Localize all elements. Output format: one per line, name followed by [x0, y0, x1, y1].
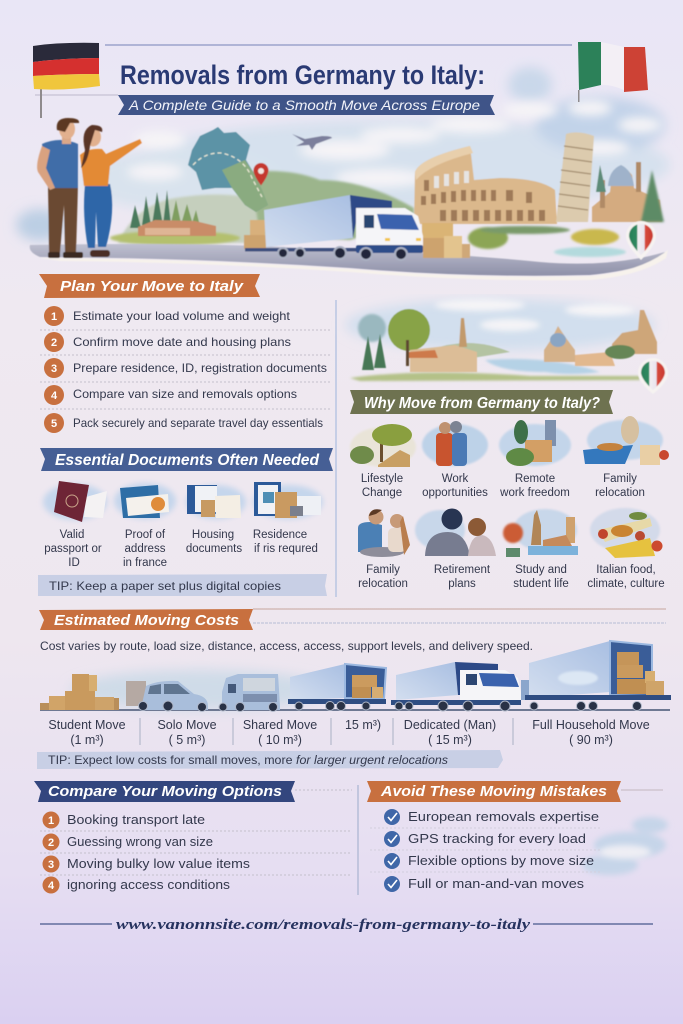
header rule lines [35, 45, 572, 95]
step 2: 2 [51, 337, 57, 349]
option 1: 1 [48, 815, 54, 827]
heading: plan your move [39, 274, 260, 298]
reason: family relocation food [583, 416, 669, 499]
reason: lifestyle change: Lifestyle [361, 473, 403, 485]
cost: box truck open [288, 664, 386, 710]
shrubs and riverbank [468, 226, 626, 257]
option 4: ignoring access conditions [67, 877, 231, 892]
hero sky [16, 67, 670, 241]
cypress trees and villa [110, 190, 240, 245]
reason: retirement plans [415, 508, 496, 590]
label: solo move: ( 5 m³) [169, 733, 205, 747]
heading: compare options: Compare Your Moving Options [48, 783, 282, 800]
step 5 [44, 413, 323, 433]
document: residence [253, 482, 321, 555]
icon: map pin [253, 163, 269, 186]
reason: family relocation food: relocation [595, 487, 645, 499]
hills [118, 194, 262, 243]
reason: study and student life: student life [513, 578, 569, 590]
heading: moving costs: Estimated Moving Costs [54, 612, 239, 629]
cost: full household truck [521, 641, 671, 710]
panel: essential documents [38, 448, 333, 596]
label: full household: ( 90 m³) [569, 733, 613, 747]
option 2: Guessing wrong van size [67, 834, 213, 849]
step 3: 3 [51, 363, 57, 375]
check item 2: GPS tracking for every load [408, 831, 586, 846]
cost description: Cost varies by route, load size, distance, access, access, support levels, and delivery speed. [40, 639, 533, 653]
step 3 [44, 358, 327, 378]
document: proof of address: address [125, 543, 166, 555]
reason: remote work freedom [499, 420, 571, 499]
label: dedicated: ( 15 m³) [428, 733, 472, 747]
panel: avoid mistakes [367, 781, 668, 892]
subtitle banner [118, 95, 495, 115]
document: proof of address [120, 485, 169, 569]
step 4 [44, 385, 297, 405]
option 3: 3 [48, 859, 54, 871]
reason: family relocation food: Family [603, 473, 637, 485]
document: passport: ID [68, 557, 80, 569]
cost: solo van [126, 681, 208, 712]
document: housing: documents [186, 543, 242, 555]
label: student move: (1 m³) [70, 733, 104, 747]
heading: moving costs [39, 609, 253, 630]
step 1: Estimate your load volume and weight [73, 309, 291, 323]
heading: avoid mistakes [367, 781, 621, 802]
map of route [188, 127, 268, 212]
man figure [37, 118, 83, 258]
panel: estimated moving costs [37, 609, 671, 769]
tip: documents: TIP: Keep a paper set plus digital copies [49, 579, 281, 593]
footer url: www.vanonnsite.com/removals-from-germany-to-italy [116, 917, 530, 933]
document: passport: passport or [44, 543, 102, 555]
heading: essential documents: Essential Documents Often Needed [55, 452, 320, 469]
heading: essential documents [40, 448, 333, 471]
label: dedicated: Dedicated (Man) [404, 718, 496, 732]
leaning tower [556, 132, 594, 222]
tip: moving costs [37, 750, 503, 769]
flag: Germany [33, 43, 100, 118]
step 5: Pack securely and separate travel day essentials [73, 416, 323, 430]
label: solo move: Solo Move [157, 718, 217, 732]
moving truck [245, 195, 423, 260]
option 2: 2 [48, 837, 54, 849]
reason: retirement plans: Retirement [434, 564, 491, 576]
step 1: 1 [51, 311, 57, 323]
reason: Italian food [587, 508, 665, 590]
reason: work opportunities [422, 421, 488, 499]
icon: Italy pin hero [626, 221, 656, 260]
reason: family relocation couple: Family [366, 564, 400, 576]
step 1 [44, 306, 291, 326]
option 4: 4 [48, 880, 55, 892]
document: passport: Valid [60, 529, 84, 541]
option 3: Moving bulky low value items [67, 856, 251, 871]
flag: Italy [578, 42, 648, 102]
reason: lifestyle change: Change [362, 487, 402, 499]
document: passport [44, 481, 107, 569]
panel: compare options [34, 781, 352, 894]
reason: remote work freedom: work freedom [499, 487, 570, 499]
icon: Italy pin [638, 358, 668, 394]
step 2: Confirm move date and housing plans [73, 335, 291, 349]
cost: dedicated truck [391, 662, 521, 711]
panel: reasons grid [350, 416, 669, 590]
reason: family relocation couple: relocation [358, 578, 408, 590]
document: housing: Housing [192, 529, 234, 541]
heading: compare options [34, 781, 295, 802]
couple pointing [37, 118, 142, 258]
option 1: Booking transport late [67, 812, 205, 827]
cost: shared van [219, 674, 280, 712]
reason: study and student life [503, 509, 578, 590]
check item 4: Full or man-and-van moves [408, 876, 585, 891]
document: residence: if ris requred [254, 543, 318, 555]
road [30, 244, 665, 276]
document: residence: Residence [253, 529, 307, 541]
label: full household: Full Household Move [532, 718, 650, 732]
step 2 [44, 332, 291, 352]
step 4: Compare van size and removals options [73, 387, 297, 401]
reason: Italian food: Italian food, [596, 564, 656, 576]
reason: work opportunities: opportunities [422, 487, 488, 499]
heading: plan your move: Plan Your Move to Italy [60, 278, 244, 295]
panel: plan your move [39, 274, 330, 433]
tip: moving costs: TIP: Expect low costs for small moves, more for larger urgent relocations [48, 753, 448, 767]
reason: lifestyle change [350, 424, 416, 499]
label: shared move: Shared Move [243, 718, 317, 732]
moving boxes [244, 220, 470, 258]
document: housing [186, 485, 242, 555]
cost: boxes [40, 674, 119, 710]
colosseum [414, 146, 557, 224]
label: 15 m3: 15 m³) [345, 718, 381, 732]
check item 1: European removals expertise [408, 809, 599, 824]
check item 3: Flexible options by move size [408, 853, 594, 868]
reason: family relocation couple [358, 509, 410, 590]
woman figure [80, 125, 142, 257]
icon: plane [292, 134, 332, 150]
heading: why move [350, 390, 613, 414]
reason: work opportunities: Work [442, 473, 469, 485]
heading: why move: Why Move from Germany to Italy? [364, 395, 600, 412]
hero illustration [16, 67, 670, 280]
reason: study and student life: Study and [515, 564, 567, 576]
title: Removals from Germany to Italy: [120, 60, 485, 90]
step 4: 4 [51, 390, 58, 402]
document: proof of address: in france [123, 557, 167, 569]
reason: remote work freedom: Remote [515, 473, 555, 485]
label: shared move: ( 10 m³) [258, 733, 302, 747]
option 1 [42, 812, 205, 828]
subtitle banner: A Complete Guide to a Smooth Move Across Europe [128, 97, 480, 113]
reason: retirement plans: plans [448, 578, 476, 590]
heading: avoid mistakes: Avoid These Moving Mistakes [380, 783, 607, 800]
basilica [592, 162, 664, 222]
label: student move: Student Move [48, 718, 126, 732]
step 5: 5 [51, 418, 57, 430]
panel: landscape illustration [345, 299, 668, 394]
tip: documents [38, 574, 327, 596]
document: proof of address: Proof of [125, 529, 166, 541]
step 3: Prepare residence, ID, registration documents [73, 361, 327, 375]
reason: Italian food: climate, culture [587, 578, 665, 590]
